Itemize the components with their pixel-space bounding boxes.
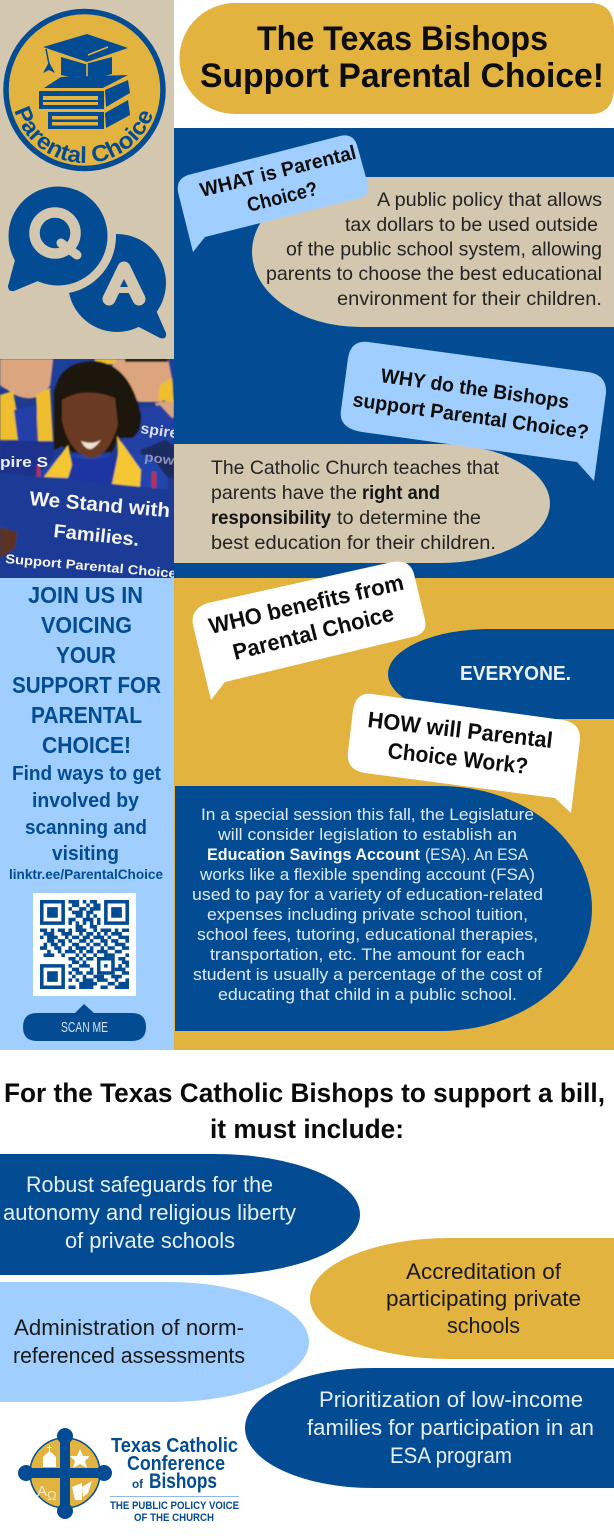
logo wordmark: Conference (127, 1453, 225, 1475)
call to action heading (12, 582, 161, 758)
call to action heading: VOICING (41, 612, 132, 638)
title banner: Support Parental Choice! (200, 57, 604, 95)
question bubble: what: Choice? (245, 178, 320, 217)
question bubble: what (178, 135, 368, 252)
heading: bill requirements (4, 1078, 605, 1144)
call to action instructions: involved by (32, 789, 140, 812)
answer: why bishops support: parents have the (211, 482, 357, 504)
requirement: accreditation: schools (447, 1313, 520, 1338)
answer: what is parental choice: parents to choose the best educational (266, 263, 602, 285)
requirement: low-income priority: ESA program (390, 1443, 512, 1468)
logo wordmark (110, 1435, 239, 1524)
question bubble: who: Parental Choice (230, 601, 396, 665)
answer: why bishops support (174, 444, 550, 563)
call to action instructions (9, 762, 163, 882)
answer: how it works: used to pay for a variety of education-related (192, 886, 543, 904)
icon: Parental Choice badge (3, 8, 166, 172)
logo emblem (18, 1428, 112, 1519)
heading: bill requirements: it must include: (210, 1114, 404, 1144)
logo emblem: Ω (47, 1488, 57, 1503)
icon: Q and A speech bubbles (0, 178, 166, 338)
photo: students holding We Stand with Families signs: We Stand with (29, 488, 171, 522)
requirement: safeguards: autonomy and religious liberty (3, 1200, 296, 1225)
panel: join us sidebar (0, 578, 174, 1050)
requirement: safeguards: Robust safeguards for the (26, 1172, 273, 1197)
answer: why bishops support: best education for their children. (211, 532, 496, 554)
answer: what is parental choice: environment for their children. (337, 288, 602, 310)
answer: how it works: will consider legislation to establish an (217, 826, 517, 844)
answer: how it works: (ESA). An ESA (425, 846, 528, 864)
call to action instructions: visiting (52, 842, 119, 865)
logo wordmark: THE PUBLIC POLICY VOICE (110, 1500, 239, 1512)
photo: students holding We Stand with Families signs: Families. (52, 521, 140, 551)
logo wordmark: of (132, 1477, 144, 1491)
answer: everyone (388, 629, 614, 719)
answer: how it works: educating that child in a public school. (218, 986, 517, 1004)
logo: Texas Catholic Conference of Bishops (18, 1428, 239, 1524)
question bubble: who: WHO benefits from (207, 570, 406, 639)
scan me button (23, 1004, 146, 1041)
photo: students holding We Stand with Families signs: pire S (0, 454, 48, 471)
answer: everyone: EVERYONE. (460, 663, 571, 685)
logo wordmark: Texas Catholic (111, 1435, 238, 1457)
question bubble: how: Choice Work? (386, 738, 529, 779)
panel: who and how section (174, 578, 614, 1050)
panel: tan sidebar (0, 0, 174, 359)
requirement: assessments (0, 1282, 309, 1402)
badge label: Parental Choice (14, 106, 152, 163)
answer: how it works: Education Savings Account (207, 846, 420, 864)
heading: bill requirements: For the Texas Catholic Bishops to support a bill, (4, 1078, 605, 1108)
requirement: accreditation: participating private (386, 1286, 581, 1311)
title banner (180, 3, 614, 114)
question bubble: why (341, 342, 606, 481)
call to action heading: YOUR (56, 642, 116, 668)
question bubble: how: HOW will Parental (366, 707, 554, 753)
question bubble: why: WHY do the Bishops (379, 365, 571, 413)
call to action heading: SUPPORT FOR (12, 672, 161, 698)
logo wordmark: OF THE CHURCH (134, 1512, 214, 1524)
title banner: The Texas Bishops (257, 20, 548, 58)
requirement: assessments: Administration of norm- (14, 1315, 244, 1340)
answer: what is parental choice: of the public school system, allowing (286, 238, 602, 260)
call to action instructions: linktr.ee/ParentalChoice (9, 866, 163, 882)
photo: students holding We Stand with Families signs: Support Parental Choice (5, 551, 177, 581)
answer: why bishops support: The Catholic Church teaches that (211, 457, 500, 479)
answer: why bishops support: right and (362, 482, 440, 504)
QR code (33, 893, 136, 996)
requirement: low-income priority: Prioritization of low-income (319, 1387, 583, 1412)
answer: how it works: transportation, etc. The amount for each (210, 946, 525, 964)
logo wordmark: Bishops (149, 1470, 217, 1493)
answer: how it works: expenses including private school tuition, (207, 906, 528, 924)
answer: how it works: In a special session this fall, the Legislature (201, 806, 534, 824)
answer: why bishops support: responsibility (211, 507, 331, 529)
question bubble: why: support Parental Choice? (351, 389, 590, 444)
photo: students holding We Stand with Families signs (0, 359, 179, 581)
call to action heading: PARENTAL (31, 702, 142, 728)
requirement: accreditation (310, 1238, 614, 1359)
requirement: safeguards: of private schools (65, 1228, 235, 1253)
logo emblem: A (37, 1483, 47, 1500)
answer: what is parental choice: A public policy that allows (377, 189, 602, 211)
call to action heading: CHOICE! (42, 732, 131, 758)
requirement: low-income priority (245, 1368, 614, 1488)
panel: what and why section (174, 128, 614, 578)
answer: how it works (175, 786, 592, 1031)
call to action instructions: Find ways to get (12, 762, 161, 785)
question bubble: how (348, 694, 580, 813)
call to action heading: JOIN US IN (28, 582, 143, 608)
requirement: low-income priority: families for participation in an (307, 1415, 594, 1440)
answer: how it works: works like a flexible spending account (FSA) (199, 866, 535, 884)
question bubble: who (193, 562, 425, 700)
answer: what is parental choice (252, 177, 614, 327)
photo: students holding We Stand with Families signs: spire (139, 420, 179, 442)
requirement: safeguards (0, 1154, 360, 1275)
call to action instructions: scanning and (25, 816, 147, 839)
requirement: accreditation: Accreditation of (406, 1259, 562, 1284)
photo: students holding We Stand with Families signs: pow (144, 449, 176, 468)
question bubble: what: WHAT is Parental (198, 142, 358, 202)
answer: how it works: student is usually a percentage of the cost of (193, 966, 542, 984)
answer: why bishops support: to determine the (337, 507, 481, 529)
requirement: assessments: referenced assessments (13, 1343, 245, 1368)
answer: how it works: school fees, tutoring, educational therapies, (197, 926, 538, 944)
scan me button: SCAN ME (61, 1019, 108, 1036)
answer: what is parental choice: tax dollars to be used outside (345, 214, 598, 236)
